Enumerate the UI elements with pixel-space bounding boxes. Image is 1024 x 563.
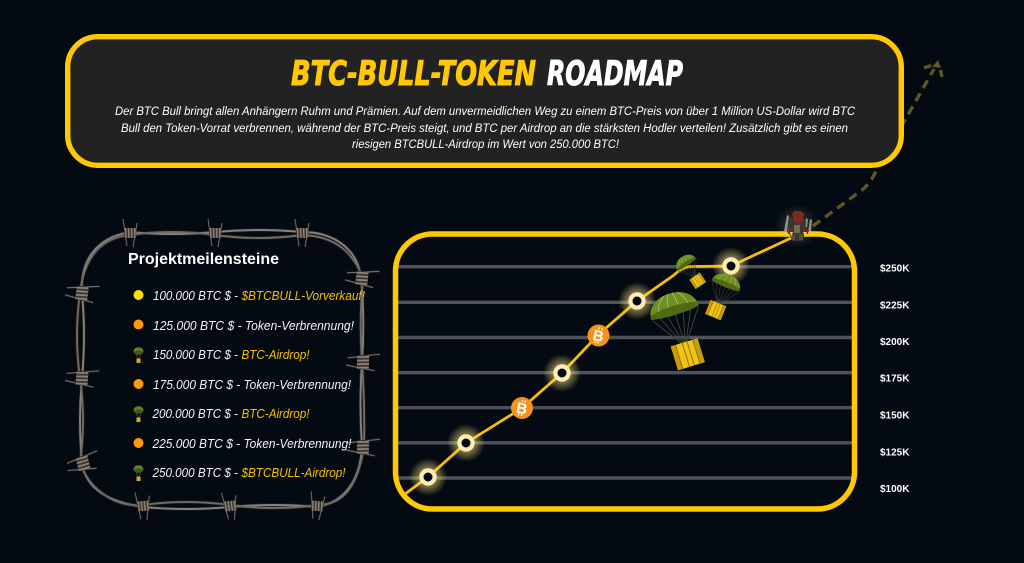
milestone ring 175K [543, 354, 581, 392]
panel: project milestones in barbed wire frame [64, 219, 380, 521]
panel: title header [68, 37, 901, 165]
text block: description: Der BTC Bull bringt allen Anhängern Ruhm und Prämien. Auf dem unvermeidlichen Weg zu einem BTC-Preis von über 1 Million US-Dollar wird BTC [115, 104, 855, 118]
chart frame [396, 234, 854, 509]
line chart: BTC price path [396, 204, 854, 509]
milestone 200.000: 200.000 BTC $ - [152, 407, 238, 421]
icon: bull mech at line tip [775, 204, 819, 248]
milestone 100.000 [134, 289, 365, 303]
milestone ring 225K [618, 282, 656, 320]
milestone coin 200K [588, 324, 610, 346]
arrow: dashed projection to the moon [813, 60, 942, 226]
axis labels: $200K [880, 337, 910, 348]
icon: large parachute crate [645, 286, 715, 374]
milestone 200.000 [134, 406, 310, 422]
axis labels: $175K [880, 374, 910, 384]
milestone 175.000: 175.000 BTC $ - Token-Verbrennung! [153, 378, 351, 392]
milestone 250.000 [134, 465, 346, 481]
text block: description: Bull den Token-Vorrat verbrennen, während der BTC-Preis steigt, und BTC per Airdrop an die stärksten Hodler verteilen! Zusätzlich gibt es einen [121, 121, 848, 135]
milestone 250.000: 250.000 BTC $ - [152, 466, 238, 480]
milestone 150.000: 150.000 BTC $ - [153, 348, 238, 362]
milestone 100.000: 100.000 BTC $ - [153, 289, 238, 303]
heading: roadmap title: ROADMAP [547, 54, 683, 93]
milestone 200.000: BTC-Airdrop! [242, 407, 310, 421]
axis labels [880, 264, 910, 495]
milestone ring 100K [409, 458, 447, 496]
axis labels: $225K [880, 300, 910, 312]
icon: top parachute crate [672, 251, 710, 292]
barbed wire frame [64, 219, 380, 521]
milestone 125.000: 125.000 BTC $ - Token-Verbrennung! [153, 319, 354, 333]
axis labels: $150K [880, 410, 910, 422]
axis labels: $125K [880, 448, 910, 458]
milestone 225.000: 225.000 BTC $ - Token-Verbrennung! [152, 437, 352, 451]
price line [405, 238, 791, 494]
text block: description [115, 104, 855, 151]
milestone ring 125K [447, 424, 485, 462]
axis labels: $250K [880, 264, 910, 274]
heading: Projektmeilensteine: Projektmeilensteine [128, 251, 279, 268]
milestone 150.000 [134, 347, 310, 363]
milestone 100.000: $BTCBULL-Vorverkauf! [241, 289, 365, 303]
milestone ring 250K [712, 247, 750, 285]
milestone coin 200K: B [591, 327, 606, 346]
milestone coin 150K: B [515, 400, 529, 418]
icon: right parachute crate [699, 269, 744, 323]
milestone 250.000: $BTCBULL-Airdrop! [241, 466, 346, 480]
text block: description: riesigen BTCBULL-Airdrop im Wert von 250.000 BTC! [352, 137, 620, 151]
heading: roadmap title: BTC-BULL-TOKEN [291, 54, 536, 93]
milestone coin 150K [511, 397, 533, 419]
heading: roadmap title [291, 54, 683, 93]
milestone 150.000: BTC-Airdrop! [242, 348, 310, 362]
axis labels: $100K [880, 484, 910, 495]
